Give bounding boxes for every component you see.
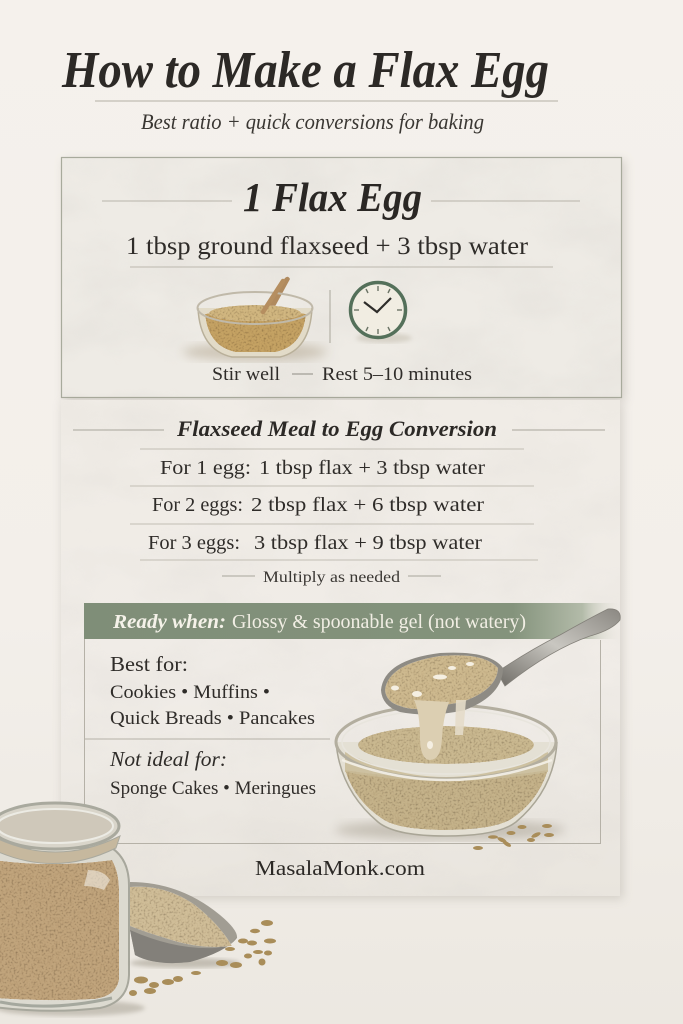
panel background	[61, 400, 623, 899]
illustration: glass bowl of flax gel	[335, 705, 565, 840]
panel: 1 flax egg	[61, 157, 625, 401]
illustration: seeds by bowl	[473, 824, 554, 850]
row: 3 eggs	[148, 533, 483, 554]
caption: stir well, rest: Rest 5–10 minutes	[322, 364, 472, 385]
row: 1 egg: 1 tbsp flax + 3 tbsp water	[259, 458, 486, 479]
icon: mixing bowl with spoon	[183, 277, 327, 361]
illustration: scoop of ground flax	[130, 882, 240, 968]
row: 1 egg	[160, 458, 486, 479]
icon: clock	[350, 282, 412, 343]
subtitle: Best ratio + quick conversions for baking	[141, 109, 484, 134]
text: not ideal for	[109, 747, 316, 799]
heading: 1 Flax Egg: 1 Flax Egg	[243, 174, 422, 220]
caption: stir well, rest	[212, 364, 472, 385]
title: How to Make a Flax Egg	[61, 42, 549, 99]
text: best for: Best for:	[110, 652, 188, 676]
row: 3 eggs: For 3 eggs:	[148, 533, 240, 554]
text: best for: Cookies • Muffins •	[110, 682, 270, 703]
banner: ready when	[84, 603, 620, 639]
text: not ideal for: Sponge Cakes • Meringues	[110, 778, 316, 799]
row: 1 egg: For 1 egg:	[160, 458, 251, 479]
illustration: scattered seeds	[129, 920, 276, 996]
heading: conversion: Flaxseed Meal to Egg Conversion	[176, 416, 497, 441]
text: best for: Quick Breads • Pancakes	[110, 708, 315, 729]
banner: ready when: Glossy & spoonable gel (not watery)	[232, 611, 526, 633]
note: multiply as needed: Multiply as needed	[263, 569, 400, 586]
website: MasalaMonk.com	[255, 856, 425, 880]
panel background	[61, 157, 625, 401]
box outline	[84, 639, 600, 844]
divider	[329, 290, 331, 343]
banner: ready when: Ready when:	[112, 611, 226, 633]
row: 2 eggs: 2 tbsp flax + 6 tbsp water	[251, 495, 485, 516]
text: best for	[110, 652, 315, 729]
row: 3 eggs: 3 tbsp flax + 9 tbsp water	[254, 533, 483, 554]
text: not ideal for: Not ideal for:	[109, 747, 227, 771]
row: 2 eggs: For 2 eggs:	[152, 495, 243, 516]
ratio text: 1 tbsp ground flaxseed + 3 tbsp water	[126, 233, 529, 260]
panel: conversion and usage	[61, 400, 623, 899]
caption: stir well, rest: Stir well	[212, 364, 280, 385]
row: 2 eggs	[152, 495, 485, 516]
illustration: glass jar of ground flax	[0, 803, 145, 1016]
illustration: spoon with dripping gel	[381, 609, 620, 760]
